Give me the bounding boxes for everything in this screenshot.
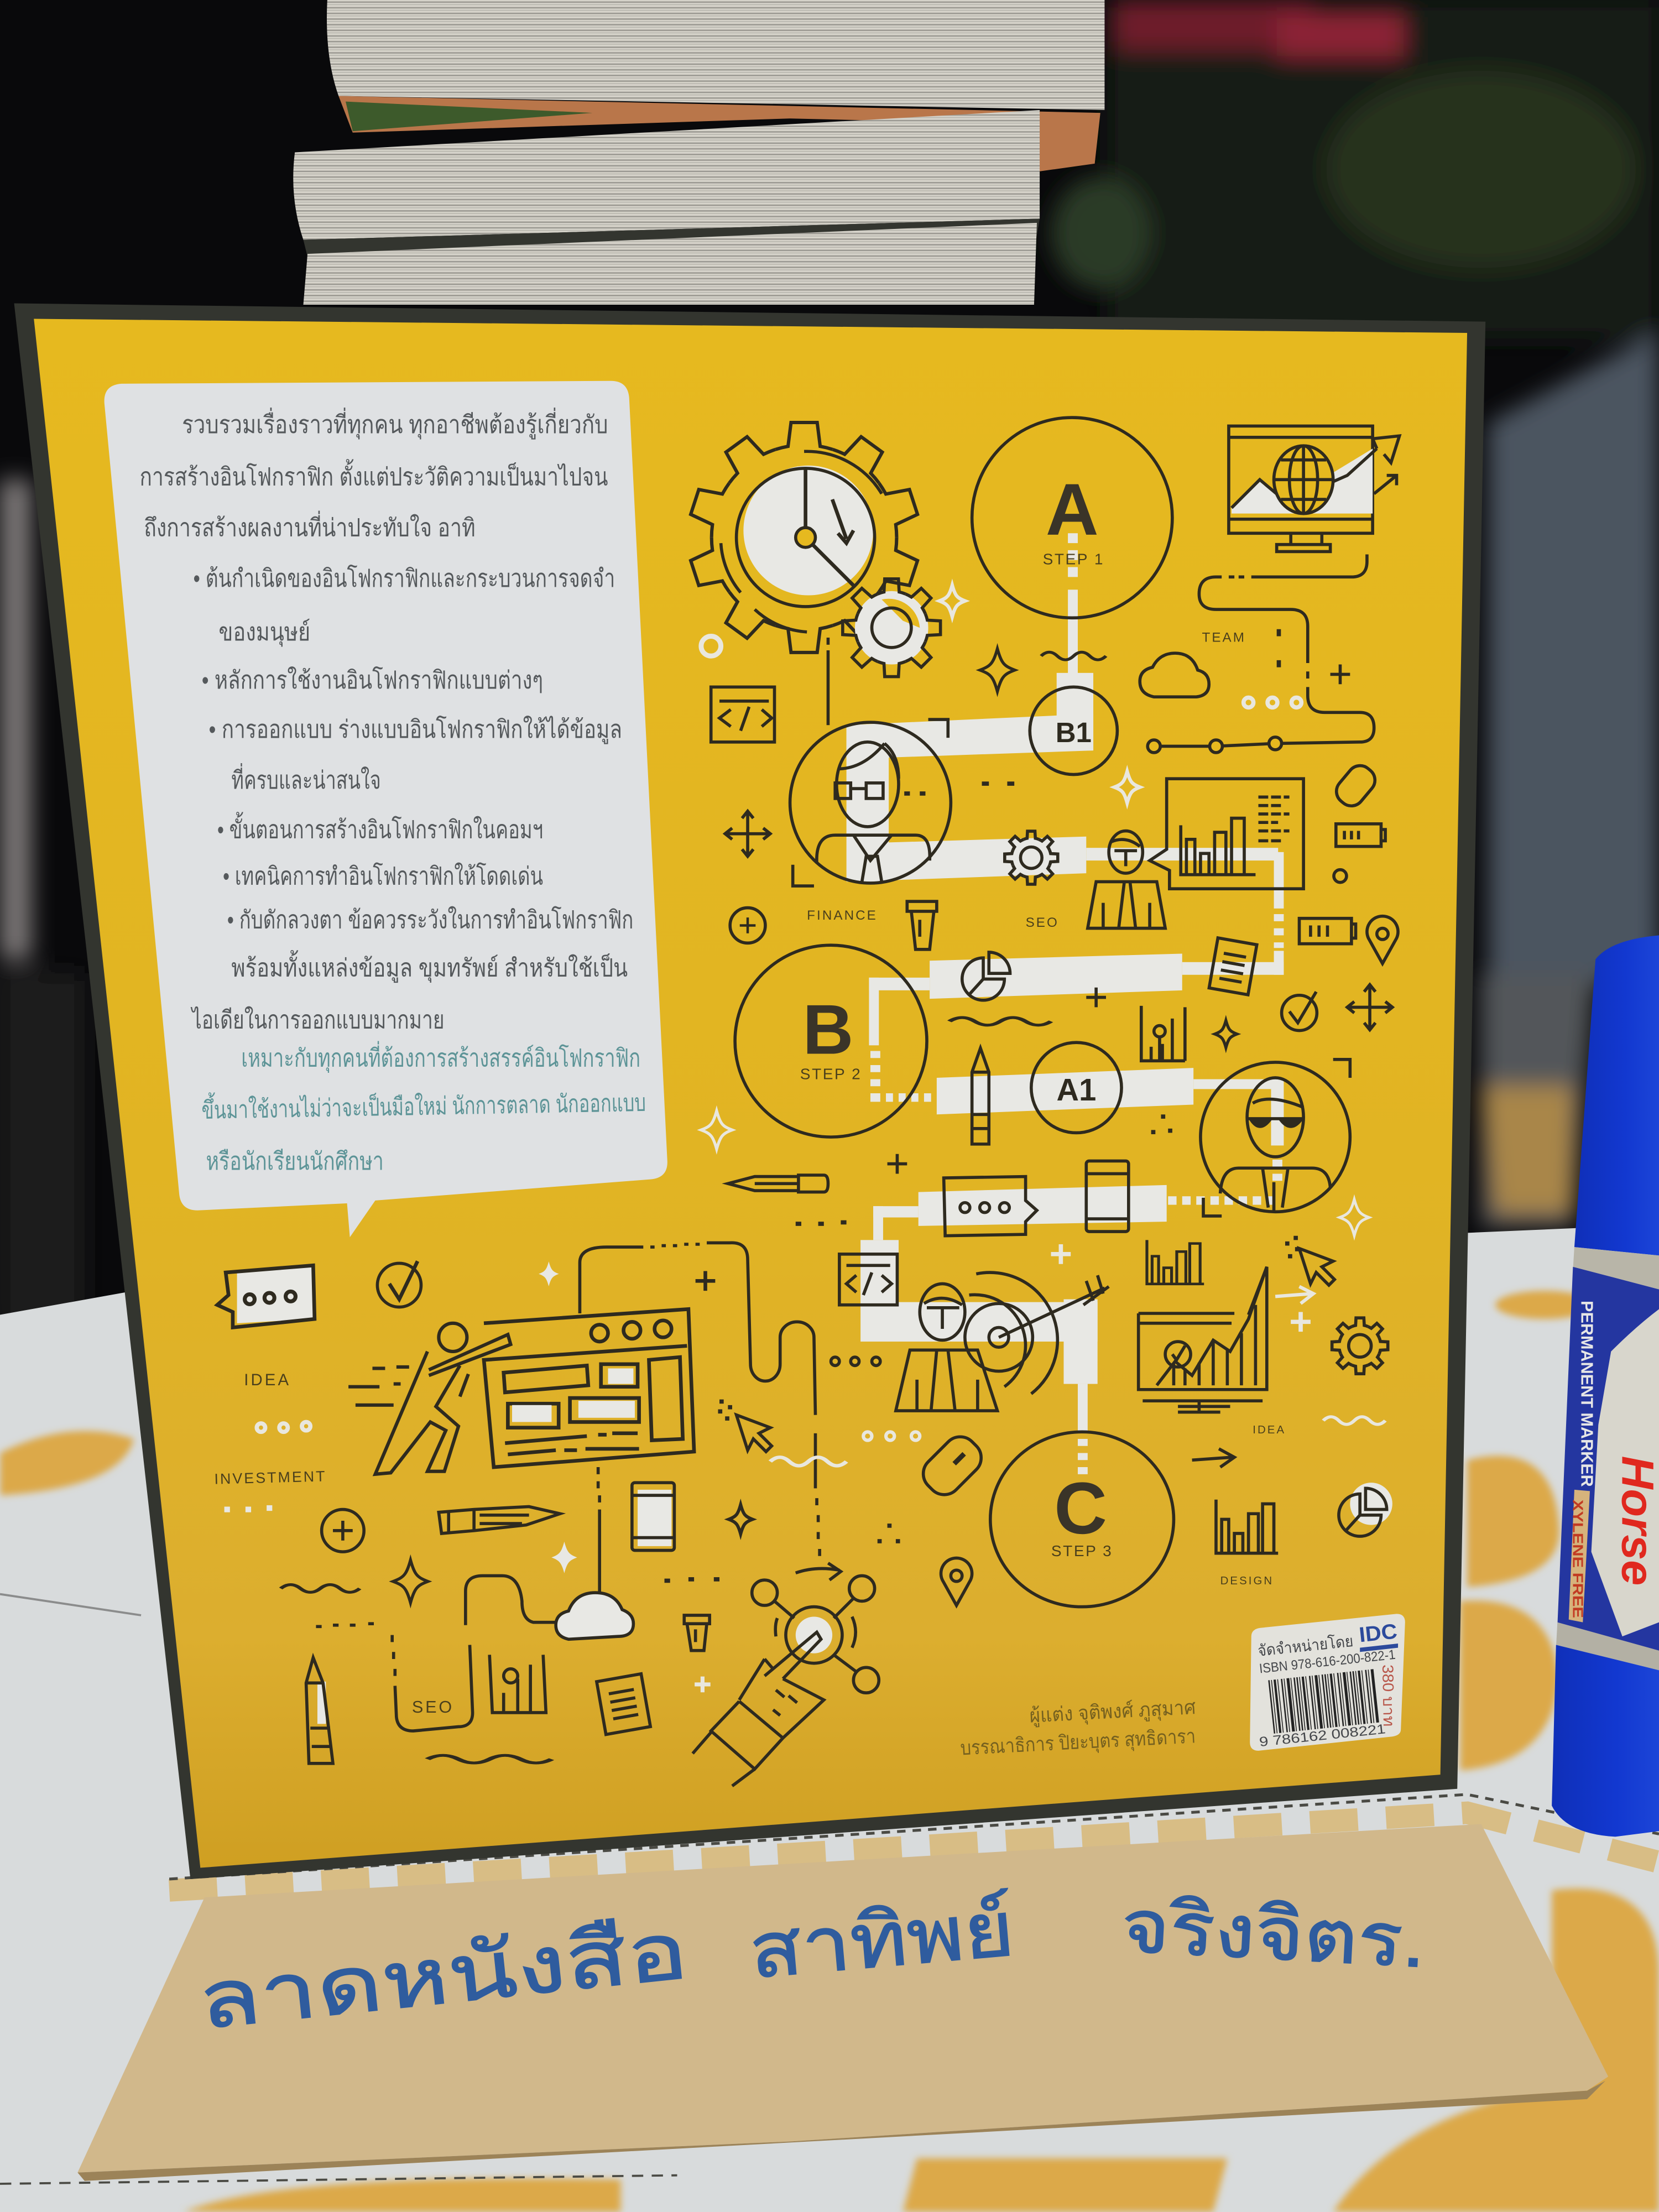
description text: หรือนักเรียนนักศึกษา xyxy=(206,1148,384,1175)
corner mark top right xyxy=(1333,1060,1350,1078)
description text: ขึ้นมาใช้งานไม่ว่าจะเป็นมือใหม่ นักการตลาด นักออกแบบ xyxy=(201,1084,646,1124)
bubble bar chart xyxy=(1150,779,1303,889)
icon: bars lower xyxy=(489,1655,546,1713)
icon: pencil lower xyxy=(439,1506,560,1533)
base xyxy=(1552,1645,1659,1837)
description text: ที่ครบและน่าสนใจ xyxy=(231,763,381,794)
white dots row top xyxy=(1244,697,1301,707)
label investment: INVESTMENT xyxy=(214,1468,327,1488)
cloud to seo line xyxy=(316,1575,556,1731)
handwritten text: ลาดหนังสือ xyxy=(194,1907,692,2046)
icon: document xyxy=(1209,938,1257,995)
icon: smartphone xyxy=(1086,1161,1129,1232)
description speech bubble panel xyxy=(105,381,667,1237)
author credits xyxy=(960,1696,1197,1760)
long connection line xyxy=(580,1243,820,1556)
cardboard shape xyxy=(77,1824,1608,2173)
top right winding line xyxy=(1154,555,1374,746)
description text: พร้อมทั้งแหล่งข้อมูล ขุมทรัพย์ สำหรับใช้เป็น xyxy=(231,950,628,983)
clock gear icon xyxy=(686,422,922,653)
circle B1 xyxy=(1030,687,1117,775)
description text: ถึงการสร้างผลงานที่น่าประทับใจ อาทิ xyxy=(144,510,476,541)
pushing figure xyxy=(348,1323,510,1474)
cover yellow area xyxy=(34,319,1467,1868)
white squares xyxy=(225,1505,272,1512)
book 2 xyxy=(293,110,1040,257)
icon: code window xyxy=(711,687,775,742)
IDC logo: IDC xyxy=(1358,1619,1399,1647)
icon: battery small xyxy=(1336,824,1385,847)
label idea: IDEA xyxy=(244,1371,291,1389)
icon: cloud xyxy=(1140,653,1209,697)
handwritten text: สาทิพย์ xyxy=(746,1886,1018,1994)
gear inner arcs xyxy=(721,451,881,632)
icon: cross arrows right xyxy=(1347,985,1392,1030)
circle A1 xyxy=(1031,1042,1121,1133)
white emblem xyxy=(1592,1309,1659,1636)
white ring left xyxy=(701,637,721,656)
icon: map pin xyxy=(1367,916,1398,963)
icon: globe monitor with rising arrow xyxy=(1229,426,1400,551)
label team: TEAM xyxy=(1202,630,1246,645)
description text: • การออกแบบ ร่างแบบอินโฟกราฟิกให้ได้ข้อมูล xyxy=(209,715,622,744)
circle B step 2: B xyxy=(802,991,854,1070)
circle B step 2: STEP 2 xyxy=(800,1066,862,1083)
circle C step 3: STEP 3 xyxy=(1051,1542,1113,1559)
circle A1: A1 xyxy=(1057,1072,1096,1107)
description text: • ขั้นตอนการสร้างอินโฟกราฟิกในคอมฯ xyxy=(217,811,543,843)
circle C step 3: C xyxy=(1054,1468,1107,1550)
icon: gear right xyxy=(1332,1318,1388,1374)
author credits: บรรณาธิการ ปิยะบุตร สุทธิดารา xyxy=(960,1725,1196,1760)
icon: network hand xyxy=(693,1563,879,1786)
description text: • เทคนิคการทำอินโฟกราฟิกให้โดดเด่น xyxy=(223,862,543,890)
cover frame xyxy=(14,303,1485,1879)
description text: การสร้างอินโฟกราฟิก ตั้งแต่ประวัติความเป็นมาไปจน xyxy=(140,459,608,491)
icon: bars center xyxy=(1147,1240,1204,1284)
big gear xyxy=(686,422,922,653)
monitor with rising chart xyxy=(1139,1267,1267,1412)
arrow right xyxy=(1192,1449,1234,1467)
circle B1: B1 xyxy=(1056,717,1092,748)
icon: map pin center xyxy=(941,1558,972,1605)
icon: phone lower xyxy=(632,1483,674,1551)
icon: plus circle left xyxy=(730,908,765,943)
icon: mouse xyxy=(1331,760,1380,811)
white dots left xyxy=(257,1422,310,1432)
label design: DESIGN xyxy=(1220,1575,1274,1587)
circle B step 2 xyxy=(735,945,927,1137)
circle A step 1: A xyxy=(1046,469,1099,551)
description text: • ต้นกำเนิดของอินโฟกราฟิกและกระบวนการจดจำ xyxy=(193,564,615,592)
distributor text: จัดจำหน่ายโดย xyxy=(1257,1632,1354,1660)
label seo top: SEO xyxy=(1026,915,1059,930)
icon: horizontal pencil xyxy=(728,1175,828,1192)
icon: pie top xyxy=(962,952,1010,1000)
browser pushed by figure xyxy=(348,1309,694,1474)
browser window xyxy=(484,1309,694,1467)
white fills inside browser xyxy=(512,1368,635,1422)
blue permanent marker xyxy=(1552,935,1659,1837)
barcode digits: 9 786162 008221 xyxy=(1259,1721,1386,1750)
icon: check circle left xyxy=(377,1261,421,1307)
person with target xyxy=(896,1272,1109,1411)
icon: document lower xyxy=(597,1674,650,1734)
bubble background xyxy=(105,381,667,1237)
circle A step 1: STEP 1 xyxy=(1043,550,1104,567)
book 3 xyxy=(303,223,1037,305)
white dots center xyxy=(863,1432,920,1441)
person with sunglasses xyxy=(1201,1062,1350,1212)
handwritten text xyxy=(194,1885,1428,2046)
cap xyxy=(1574,935,1659,1255)
icon: plus circle lower xyxy=(322,1510,364,1552)
floral band xyxy=(0,1794,1659,2184)
stacked books xyxy=(293,0,1104,305)
icon: vertical pencil right xyxy=(972,1048,989,1144)
silver band xyxy=(1573,1247,1659,1292)
icon: cup bottom xyxy=(684,1615,709,1651)
three dots center xyxy=(831,1357,880,1365)
white wave center xyxy=(770,1457,847,1466)
handwritten text: จริงจิตร. xyxy=(1119,1885,1428,1983)
corner mark bottom left xyxy=(1203,1198,1222,1216)
icon: diamond center xyxy=(729,1505,753,1534)
lower band xyxy=(1556,1623,1659,1670)
icon: cup xyxy=(907,901,937,950)
icon: check circle xyxy=(1282,992,1317,1031)
description text: รวบรวมเรื่องราวที่ทุกคน ทุกอาชีพต้องรู้เกี่ยวกับ xyxy=(182,408,608,440)
icon: code window center xyxy=(839,1254,897,1305)
decorative waves and pluses xyxy=(281,652,1385,1763)
icon: pie right xyxy=(1339,1483,1392,1536)
sticker background xyxy=(1250,1614,1405,1751)
node dots on winding line xyxy=(1147,737,1282,753)
icon: white cloud xyxy=(556,1593,633,1639)
icon: bars with node xyxy=(1141,1006,1185,1061)
description text: ของมนุษย์ xyxy=(218,618,310,647)
corner marks around person xyxy=(793,719,948,886)
book back cover xyxy=(14,303,1485,1879)
gear SEO xyxy=(1005,831,1058,884)
label idea right: IDEA xyxy=(1253,1424,1286,1436)
description text: • กับดักลวงตา ข้อควรระวังในการทำอินโฟกราฟิก xyxy=(227,906,633,934)
dark path lines xyxy=(316,555,1374,1731)
small square dots xyxy=(665,629,1281,1583)
cardboard sign xyxy=(77,1824,1608,2181)
icon: battery large xyxy=(1299,919,1356,944)
decorative sparkles xyxy=(393,585,1369,1603)
description text: • หลักการใช้งานอินโฟกราฟิกแบบต่างๆ xyxy=(202,666,543,694)
target xyxy=(965,1272,1109,1394)
label finance: FINANCE xyxy=(807,908,878,923)
description text: เหมาะกับทุกคนที่ต้องการสร้างสรรค์อินโฟกราฟิก xyxy=(241,1041,640,1073)
icon: bars design xyxy=(1216,1500,1278,1553)
label seo lower: SEO xyxy=(412,1698,454,1717)
icon: chat bubble left xyxy=(217,1265,315,1328)
xylene box: XYLENE FREE xyxy=(1569,1500,1585,1618)
icon: cross arrows left xyxy=(725,811,770,856)
description text: ไอเดียในการออกแบบมากมาย xyxy=(191,1006,445,1034)
icon: cursor right xyxy=(1285,1236,1334,1285)
gear to person line xyxy=(827,638,829,725)
icon: cursor center xyxy=(718,1400,771,1452)
barcode xyxy=(1271,1695,1377,1707)
icon: mouse center xyxy=(916,1430,988,1501)
browser to cloud line xyxy=(598,1467,599,1593)
icon: bubble with dots xyxy=(944,1177,1037,1236)
circle A step 1 xyxy=(972,418,1172,618)
label xyxy=(1557,1267,1659,1653)
small presenter person xyxy=(1088,831,1165,928)
icon: pencil vertical lower xyxy=(306,1657,333,1764)
small ring xyxy=(1334,870,1347,883)
circle C step 3 xyxy=(990,1432,1173,1607)
marker text: PERMANENT MARKER xyxy=(1578,1301,1597,1487)
ISBN price sticker xyxy=(1250,1614,1405,1751)
xylene box xyxy=(1569,1490,1590,1623)
white connector bars xyxy=(847,533,1284,1474)
white arrow right xyxy=(1275,1287,1313,1303)
person with glasses finance xyxy=(790,722,951,883)
description text xyxy=(140,408,646,1175)
clock face xyxy=(743,466,873,596)
author credits: ผู้แต่ง จุติพงศ์ ภูสุมาศ xyxy=(1029,1696,1197,1728)
price: 380 บาท xyxy=(1379,1665,1397,1727)
ISBN number: ISBN 978-616-200-822-1 xyxy=(1259,1647,1396,1676)
small gear with white center xyxy=(843,579,941,677)
book 1 xyxy=(327,0,1104,172)
